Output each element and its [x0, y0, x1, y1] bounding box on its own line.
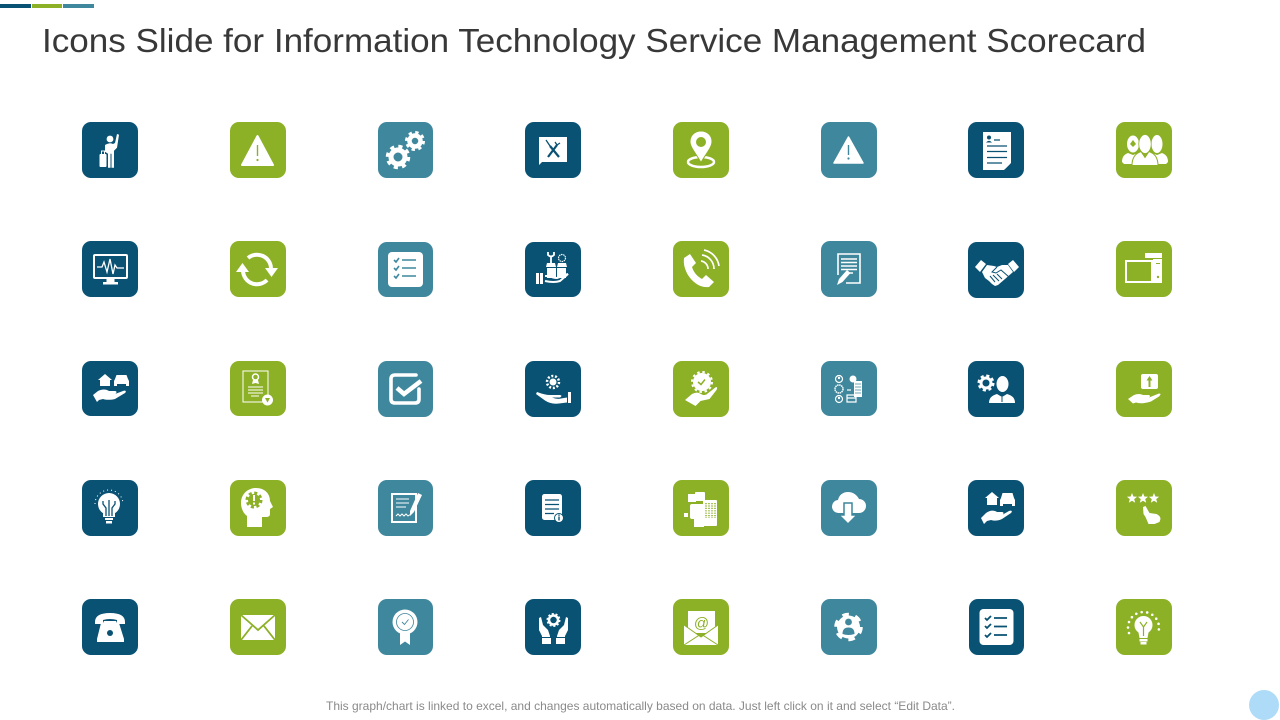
- icon: hand with upload box: [1116, 361, 1172, 417]
- icon: three stars and pointer hand: [1116, 480, 1172, 536]
- icon: head with gear: [230, 480, 286, 536]
- icon: heartbeat monitor: [82, 241, 138, 297]
- icon: cloud download: [821, 480, 877, 536]
- icon: document with pen: [821, 241, 877, 297]
- icon: location pin: [673, 122, 729, 178]
- icon: envelope: [230, 599, 286, 655]
- icon: warning triangle: [821, 122, 877, 178]
- icon: lightbulb with dots: [1116, 599, 1172, 655]
- accent bars: [0, 4, 94, 8]
- icon: handshake: [968, 242, 1024, 298]
- icon: process diagram: [821, 361, 877, 416]
- icon: circuit lightbulb: [82, 480, 138, 536]
- icon: rotary telephone: [82, 599, 138, 655]
- footnote: This graph/chart is linked to excel, and changes automatically based on data. Just left click on it and select “Edit Data”.: [326, 699, 955, 713]
- icon: tablet with modules: [673, 480, 729, 536]
- icon: checklist: [969, 599, 1024, 655]
- icon: hand holding house and car: [968, 480, 1024, 536]
- icon: contract and pen: [378, 480, 433, 536]
- icon: traveler with suitcase: [82, 122, 138, 178]
- icon: document profile: [968, 122, 1024, 178]
- icon: open envelope with at sign: @: [694, 615, 709, 632]
- icon: checkbox: [378, 361, 433, 417]
- icon: ribbon badge: [378, 599, 433, 655]
- icon: gear and person: [968, 361, 1024, 417]
- icon: open envelope with at sign: [673, 599, 729, 655]
- icon: certificate: [230, 361, 286, 416]
- decorative circle button: [1249, 690, 1279, 720]
- icon: sync arrows: [230, 241, 286, 297]
- icon: gear with person: [821, 599, 877, 655]
- icon: document with info: [525, 480, 581, 536]
- title: Icons Slide for Information Technology Service Management Scorecard: [42, 22, 1146, 59]
- icon: hand with gear: [525, 361, 581, 417]
- icon: hand with tool boxes: [525, 242, 581, 297]
- icon: group of people: [1116, 122, 1172, 178]
- icon: speech bubble with tools: [525, 122, 581, 178]
- icon: checklist: [378, 242, 433, 297]
- icon: hand holding house and car: [82, 361, 138, 416]
- icon: two gears: [378, 122, 433, 178]
- icon: warning triangle: [230, 122, 286, 178]
- icon: desktop computer: [1116, 241, 1172, 297]
- icon: phone with signal: [673, 241, 729, 297]
- icon: hands holding gear: [525, 599, 581, 655]
- icon: hand with quality badge: [673, 361, 729, 417]
